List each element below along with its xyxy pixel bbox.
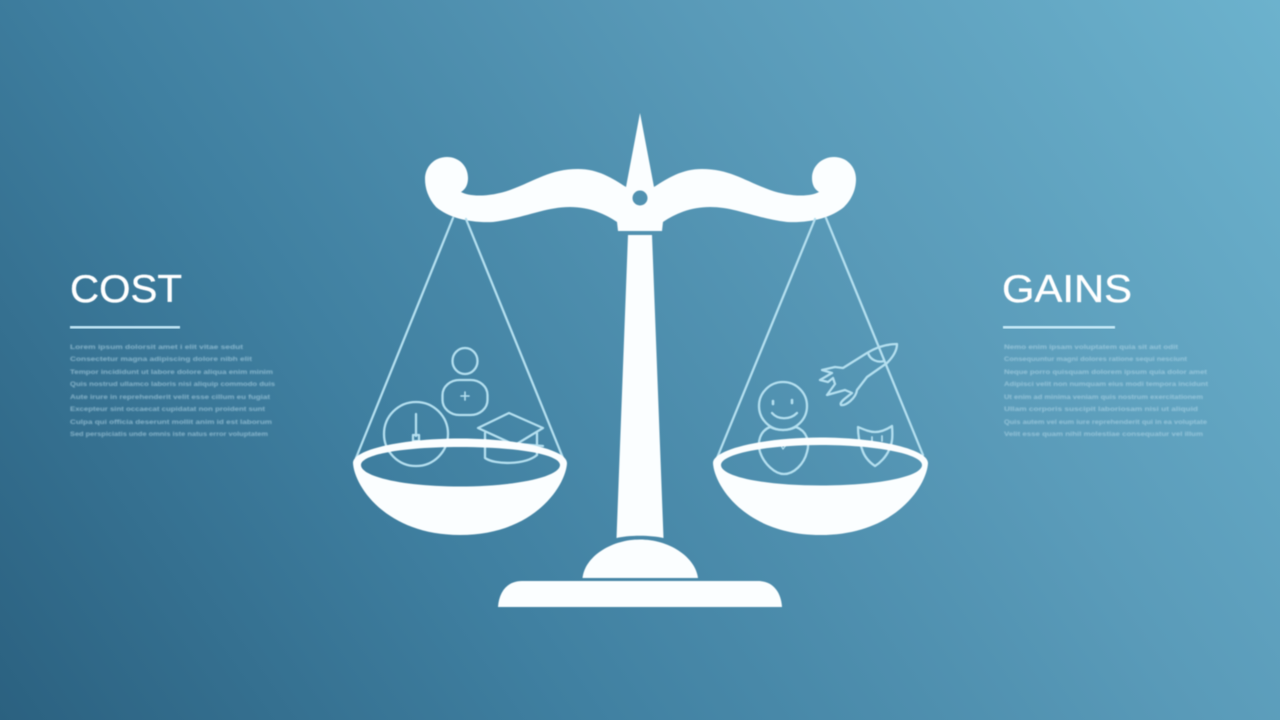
text block: gains: Quis autem vel eum iure reprehenderit qui in ea voluptate	[1004, 419, 1207, 426]
text block: cost: Lorem ipsum dolorsit amet i elit vitae sedut	[70, 344, 244, 351]
text block: gains	[1004, 344, 1209, 438]
icon: rocket (gains)	[820, 344, 897, 405]
text block: gains: Adipisci velit non numquam eius modi tempora incidunt	[1004, 381, 1209, 388]
text block: cost: Aute irure in reprehenderit velit esse cillum eu fugiat	[70, 394, 271, 401]
text block: gains: Velit esse quam nihil molestiae consequatur vel illum	[1004, 431, 1203, 438]
panel: gains	[1002, 268, 1209, 438]
icon: clock (cost)	[384, 402, 448, 466]
text block: cost: Sed perspiciatis unde omnis iste natus error voluptatem	[70, 431, 268, 438]
left pan	[353, 438, 567, 535]
text block: gains: Nemo enim ipsam voluptatem quia sit aut odit	[1004, 344, 1179, 351]
scale beam with pointer	[425, 113, 856, 231]
heading underline: gains	[1003, 326, 1115, 329]
panel: cost	[70, 268, 275, 438]
text block: gains: Neque porro quisquam dolorem ipsum quia dolor amet	[1004, 369, 1208, 376]
text block: cost: Quis nostrud ullamco laboris nisi aliquip commodo duis	[70, 381, 275, 388]
text block: cost: Excepteur sint occaecat cupidatat non proident sunt	[70, 406, 266, 413]
heading: cost: COST	[70, 268, 182, 311]
scale dome	[582, 540, 698, 578]
scale base	[498, 581, 782, 607]
icon: smiling person (gains)	[759, 382, 808, 474]
icon: shield (gains)	[858, 426, 892, 466]
icon: graduation cap (cost)	[478, 413, 543, 463]
icon: person (cost)	[442, 348, 488, 415]
text block: cost: Consectetur magna adipiscing dolore nibh elit	[70, 356, 253, 363]
scale column	[616, 235, 664, 538]
right pan	[713, 438, 928, 535]
heading underline: cost	[70, 326, 180, 329]
balance scale	[353, 113, 928, 607]
text block: cost: Tempor incididunt ut labore dolore aliqua enim minim	[70, 369, 273, 376]
heading: gains: GAINS	[1002, 268, 1132, 311]
text block: gains: Consequuntur magni dolores ratione sequi nesciunt	[1004, 356, 1188, 363]
text block: cost: Culpa qui officia deserunt mollit anim id est laborum	[70, 419, 272, 426]
left pan strings	[356, 218, 563, 458]
text block: gains: Ullam corporis suscipit laboriosam nisi ut aliquid	[1004, 406, 1198, 413]
text block: cost	[70, 344, 275, 438]
text block: gains: Ut enim ad minima veniam quis nostrum exercitationem	[1004, 394, 1203, 401]
right pan strings	[717, 218, 923, 458]
